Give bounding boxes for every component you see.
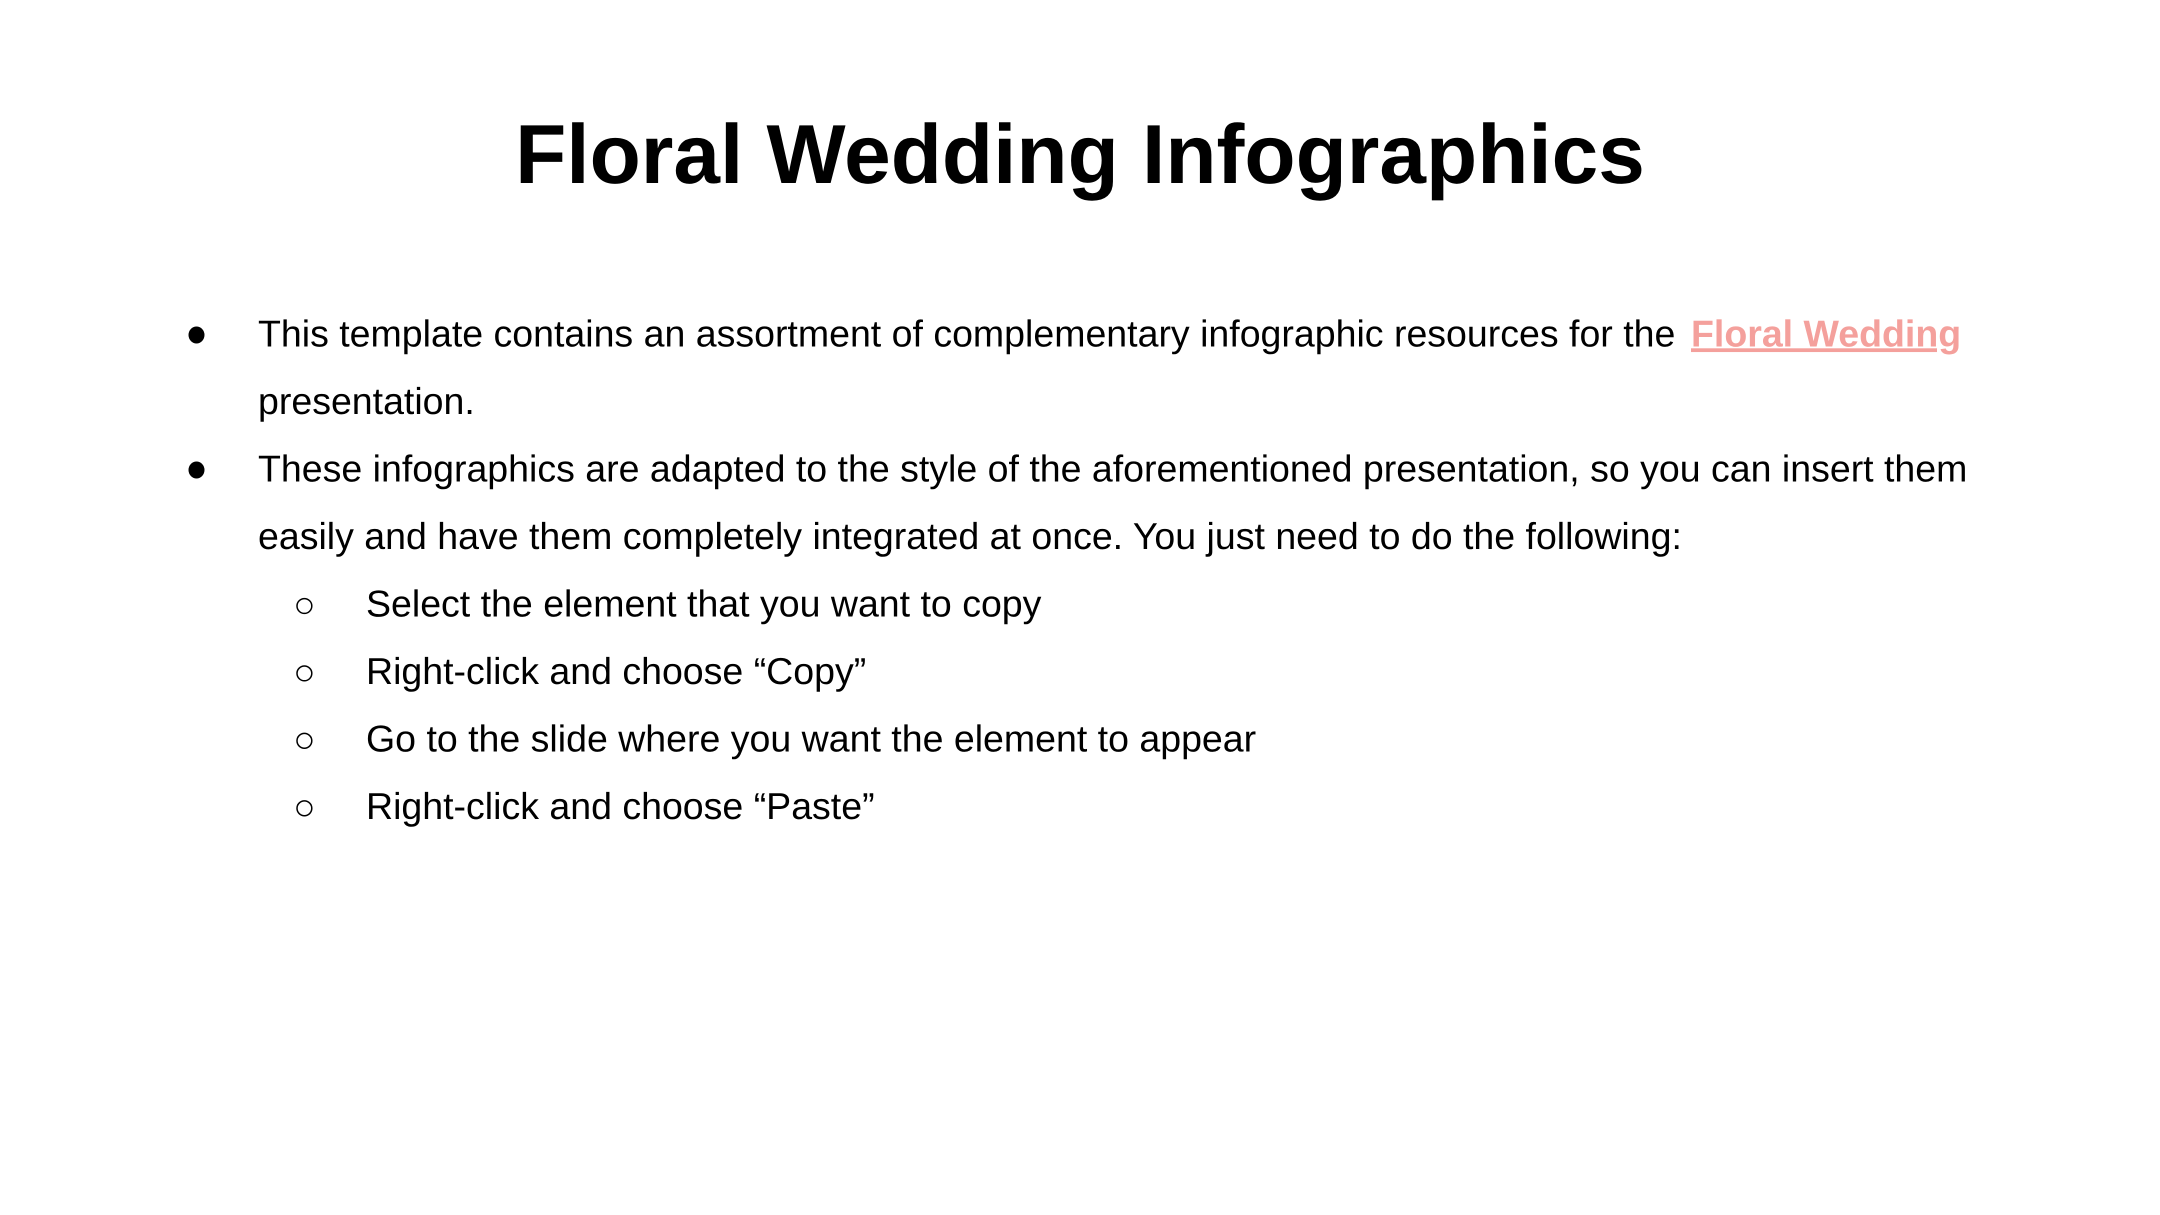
bulleted list: [188, 312, 1967, 827]
sub-bullet: select: Select the element that you want to copy: [366, 582, 1042, 624]
bullet item 1: Floral Wedding: [1691, 312, 1961, 354]
bullet item 1: presentation.: [258, 380, 475, 422]
bullet item 2: [188, 447, 1967, 557]
sub-bullet: copy: Right-click and choose “Copy”: [366, 650, 866, 692]
title: Floral Wedding Infographics: [515, 107, 1645, 201]
sub-bullet: paste: Right-click and choose “Paste”: [366, 785, 875, 827]
bullet item 1: [188, 312, 1961, 422]
bullet item 2: easily and have them completely integrated at once. You just need to do the following:: [258, 515, 1682, 557]
bullet item 2: These infographics are adapted to the style of the aforementioned presentation, so you can insert them: [258, 447, 1967, 489]
bullet item 1: This template contains an assortment of complementary infographic resources for the: [258, 312, 1675, 354]
sub-bullet: go to slide: Go to the slide where you want the element to appear: [366, 717, 1256, 759]
